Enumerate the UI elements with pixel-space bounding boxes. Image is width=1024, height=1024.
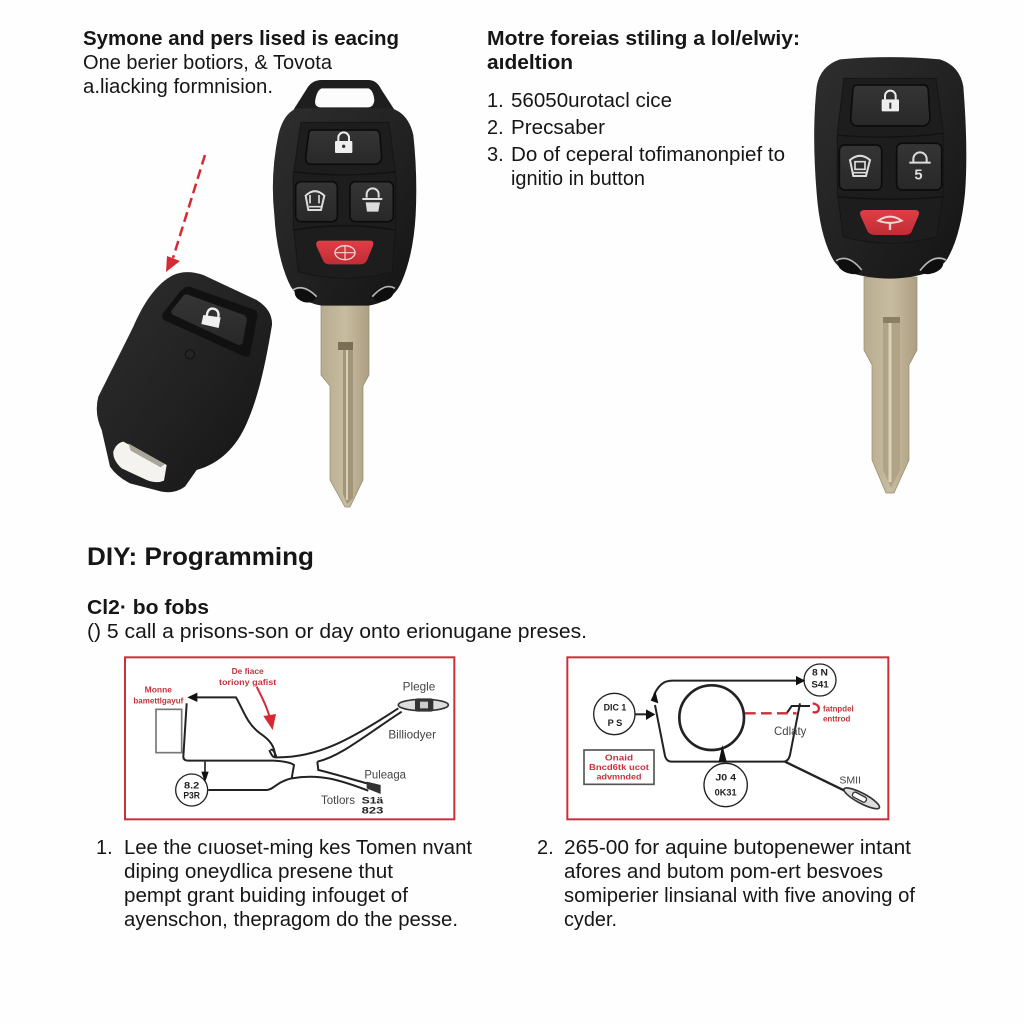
text block: section intro: Cl2· bo fobs bbox=[87, 597, 209, 619]
icon: centre key blade bbox=[321, 305, 369, 507]
text block: top right numbered list: 2. bbox=[487, 117, 504, 139]
text block: step 1: Lee the cıuoset-ming kes Tomen nvant bbox=[124, 837, 472, 859]
diagram: left wiring: Puleaga bbox=[364, 768, 406, 781]
text block: top right numbered list bbox=[487, 28, 800, 190]
icon: right key blade bbox=[864, 277, 917, 493]
button: left panic icon bbox=[296, 182, 337, 222]
text block: step 2: 265-00 for aquine butopenewer intant bbox=[564, 837, 911, 859]
icon: right remote key bbox=[814, 57, 966, 279]
diagram: left wiring: Monne bbox=[145, 685, 172, 695]
callout: red note box: advmnded bbox=[596, 772, 641, 782]
text block: top right numbered list: 56050urotacl cice bbox=[511, 90, 672, 112]
text block: top left intro: One berier botiors, & Tovota bbox=[83, 52, 333, 74]
text block: top right numbered list: ignitio in button bbox=[511, 168, 645, 190]
text block: step 2: afores and butom pom-ert besvoes bbox=[564, 861, 883, 883]
diagram: left wiring: De fiace bbox=[232, 666, 264, 676]
text block: step 1: pempt grant buiding infouget of bbox=[124, 885, 408, 907]
text block: step 2: cyder. bbox=[564, 909, 617, 931]
text block: top right numbered list: Motre foreias stiling a lol/elwiy: bbox=[487, 28, 800, 50]
callout: red note box bbox=[584, 750, 654, 784]
icon: small fob bbox=[842, 785, 882, 812]
diagram: left wiring: Totlors bbox=[321, 794, 355, 807]
text block: top left intro: Symone and pers lised is eacing bbox=[83, 28, 399, 50]
diagram: right wiring: P S bbox=[608, 718, 622, 728]
text block: top left intro bbox=[83, 28, 399, 98]
text block: step 1: diping oneydlica presene thut bbox=[124, 861, 393, 883]
diagram: left wiring: S1ä bbox=[362, 795, 385, 805]
text block: step 1: 1. bbox=[96, 837, 113, 859]
heading: DIY Programming: DIY: Programming bbox=[87, 543, 314, 571]
diagram: right wiring: Cdlaty bbox=[774, 725, 806, 738]
diagram: left wiring: Plegle bbox=[403, 681, 435, 694]
callout: red note box: Onaid bbox=[605, 753, 633, 763]
text block: top right numbered list: Precsaber bbox=[511, 117, 605, 139]
diagram: left wiring bbox=[125, 657, 454, 819]
diagram: left wiring: toriony gafist bbox=[219, 677, 276, 687]
text block: top right numbered list: 1. bbox=[487, 90, 504, 112]
diagram: left wiring: P3R bbox=[183, 791, 200, 801]
icon: left slot bbox=[293, 285, 317, 305]
icon: rotated one-button fob bbox=[97, 272, 272, 492]
icon: centre remote key with four buttons bbox=[273, 80, 416, 306]
diagram: right wiring: enttrod bbox=[823, 713, 850, 723]
text block: step 2 bbox=[537, 837, 915, 931]
diagram: right wiring: S41 bbox=[811, 679, 829, 689]
diagram: right wiring: J0 4 bbox=[715, 773, 736, 783]
diagram: left wiring: 823 bbox=[362, 805, 383, 815]
arrow: red dashed pointer bbox=[166, 155, 205, 272]
icon: padlock on rotated fob bbox=[201, 309, 221, 328]
diagram: right wiring: 0K31 bbox=[715, 787, 737, 797]
button: red panic bbox=[316, 241, 373, 264]
text block: step 1: ayenschon, thepragom do the pesse. bbox=[124, 909, 458, 931]
diagram: left wiring: 8.2 bbox=[184, 781, 199, 791]
icon: left slot bbox=[836, 256, 863, 277]
icon: small fob bbox=[398, 698, 448, 712]
text block: top left intro: a.liacking formnision. bbox=[83, 76, 273, 98]
icon: right slot bbox=[371, 284, 396, 304]
diagram: right wiring bbox=[567, 657, 888, 819]
button: right unlock icon bbox=[897, 143, 942, 190]
text block: section intro: () 5 call a prisons-son or day onto erionugane preses. bbox=[87, 621, 587, 643]
text block: top right numbered list: 3. bbox=[487, 144, 504, 166]
button: left panic icon bbox=[839, 145, 882, 190]
text block: step 2: somiperier linsianal with five anoving of bbox=[564, 885, 915, 907]
text block: step 1 bbox=[96, 837, 472, 931]
diagram: right wiring: SMII bbox=[839, 775, 861, 786]
diagram: right wiring: fatnpdel bbox=[823, 704, 854, 714]
text block: top right numbered list: aıdeltion bbox=[487, 52, 573, 74]
diagram: right wiring: 8 N bbox=[812, 667, 828, 677]
diagram: left wiring: bamettlgayuf bbox=[133, 695, 183, 705]
button: right unlock icon bbox=[350, 182, 393, 222]
icon: right slot bbox=[918, 256, 946, 277]
diagram: right wiring: DIC 1 bbox=[604, 703, 626, 713]
text block: step 2: 2. bbox=[537, 837, 554, 859]
button: red panic bbox=[860, 210, 919, 235]
callout: red note box: Bncd6tk ucot bbox=[589, 762, 649, 772]
button: right unlock icon: 5 bbox=[914, 167, 922, 183]
button: lock bbox=[306, 130, 382, 164]
text block: section intro bbox=[87, 597, 587, 643]
diagram: left wiring: Billiodyer bbox=[388, 728, 436, 741]
button: lock bbox=[851, 85, 930, 126]
text block: top right numbered list: Do of ceperal tofimanonpief to bbox=[511, 144, 785, 166]
